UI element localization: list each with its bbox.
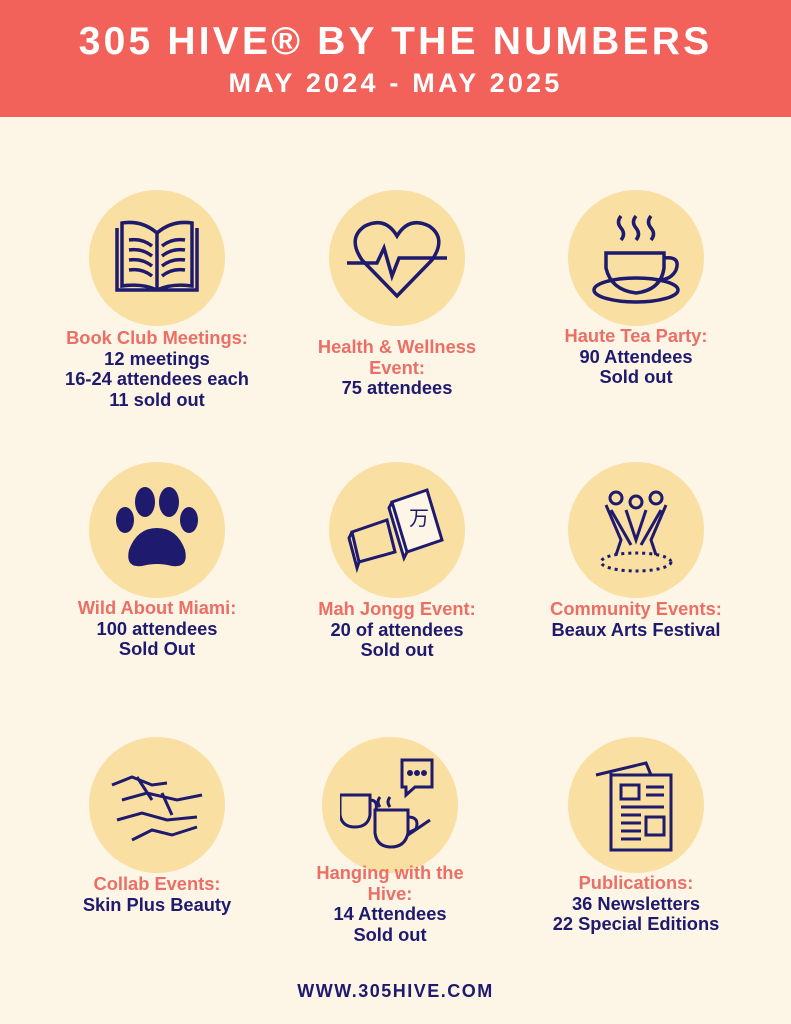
icon: mahjong: 万 — [409, 502, 429, 531]
text: collab: Collab Events: — [94, 873, 220, 894]
text: collab — [83, 873, 231, 915]
icon: heart — [329, 190, 465, 326]
text: tea — [565, 325, 707, 387]
icon: mahjong — [329, 462, 465, 598]
text: wild: 100 attendees — [97, 618, 217, 638]
text: health: Event: — [369, 356, 425, 378]
text: publications — [553, 872, 719, 934]
text: book club: Book Club Meetings: — [66, 327, 248, 348]
text: health: Health & Wellness — [318, 336, 476, 357]
text: tea: Haute Tea Party: — [565, 325, 707, 346]
subtitle: MAY 2024 - MAY 2025 — [228, 68, 562, 98]
text: collab: Skin Plus Beauty — [83, 894, 231, 914]
text: hanging — [316, 862, 464, 944]
text: book club: 16-24 attendees each — [65, 368, 249, 389]
text: community: Community Events: — [550, 598, 722, 619]
text: tea: 90 Attendees — [579, 346, 693, 366]
icon: hands — [89, 737, 225, 873]
footer url: WWW.305HIVE.COM — [297, 981, 494, 1001]
icon: newspaper — [568, 737, 704, 873]
text: wild — [78, 597, 236, 659]
text: publications: 36 Newsletters — [572, 892, 700, 914]
text: publications: Publications: — [579, 872, 693, 893]
text: book club: 12 meetings — [104, 348, 210, 368]
text: publications: 22 Special Editions — [553, 913, 719, 934]
text: mahjong — [318, 598, 476, 660]
icon: community — [568, 462, 704, 598]
icon: paw — [89, 462, 225, 598]
text: wild: Wild About Miami: — [78, 597, 236, 618]
text: book club — [65, 327, 249, 410]
text: hanging: Hanging with the — [316, 862, 464, 883]
icon: coffee chat — [322, 737, 458, 873]
text: tea: Sold out — [599, 366, 673, 387]
text: hanging: Sold out — [353, 924, 427, 944]
text: hanging: Hive: — [368, 882, 412, 904]
text: mahjong: Sold out — [360, 639, 434, 660]
text: mahjong: Mah Jongg Event: — [318, 598, 476, 619]
icon: book — [89, 190, 225, 326]
title: 305 HIVE® BY THE NUMBERS — [79, 20, 712, 63]
text: hanging: 14 Attendees — [333, 903, 447, 924]
icon: tea — [568, 190, 704, 326]
text: health: 75 attendees — [342, 377, 452, 398]
text: community: Beaux Arts Festival — [551, 618, 720, 640]
text: wild: Sold Out — [119, 638, 195, 659]
text: health — [318, 336, 476, 398]
text: mahjong: 20 of attendees — [330, 618, 464, 640]
text: community — [550, 598, 722, 640]
text: book club: 11 sold out — [109, 388, 205, 410]
header banner — [0, 0, 791, 117]
